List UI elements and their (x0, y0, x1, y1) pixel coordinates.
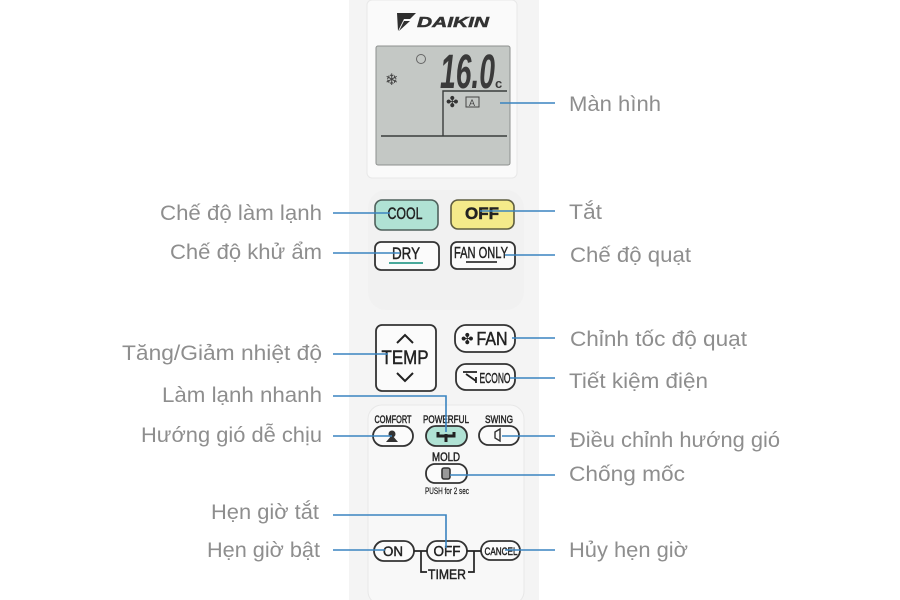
LCD screen: ✤ (446, 94, 459, 111)
LCD screen: 16.0 (440, 46, 495, 99)
button: OFF (451, 200, 514, 229)
LCD screen (376, 46, 510, 165)
button: TEMP: TEMP (382, 348, 428, 369)
button: COMFORT: COMFORT (374, 414, 412, 426)
button: COMFORT (373, 414, 413, 446)
label: Tăng/Giảm nhiệt độ: Tăng/Giảm nhiệt độ (122, 342, 322, 365)
button: FAN: ✤ (461, 331, 474, 348)
button: POWERFUL (423, 414, 469, 446)
timer buttons: CANCEL (484, 546, 518, 558)
label: Chế độ khử ẩm: Chế độ khử ẩm (170, 241, 322, 264)
button: POWERFUL: POWERFUL (423, 414, 469, 426)
Daikin logo (397, 13, 491, 31)
label: Chế độ làm lạnh: Chế độ làm lạnh (160, 202, 322, 225)
remote control body (349, 0, 539, 600)
timer buttons (374, 541, 520, 582)
button: SWING (479, 414, 519, 445)
label: Chỉnh tốc độ quạt: Chỉnh tốc độ quạt (570, 328, 747, 351)
label: Chống mốc: Chống mốc (569, 463, 685, 486)
LCD screen: A (469, 98, 475, 108)
button: DRY: DRY (392, 244, 420, 263)
label: Điều chỉnh hướng gió: Điều chỉnh hướng gió (570, 429, 780, 452)
timer buttons: OFF (434, 543, 460, 560)
timer buttons: ON (383, 543, 403, 559)
button: TEMP (376, 325, 436, 391)
Daikin logo: DAIKIN (417, 14, 491, 31)
LCD screen: c (495, 76, 502, 91)
leader lines (333, 103, 555, 550)
label: Làm lạnh nhanh: Làm lạnh nhanh (162, 384, 322, 407)
button: FAN: FAN (476, 329, 508, 349)
LCD screen: ❄ (385, 72, 398, 89)
button: MOLD: MOLD (432, 450, 460, 464)
label: Hủy hẹn giờ: Hủy hẹn giờ (569, 539, 688, 562)
button: MOLD (425, 450, 469, 496)
button: COOL: COOL (388, 204, 422, 223)
label: Tắt: Tắt (569, 201, 602, 224)
label: Hướng gió dễ chịu: Hướng gió dễ chịu (141, 424, 322, 447)
timer buttons: TIMER (428, 566, 466, 582)
button: COOL (375, 200, 438, 230)
button: FAN (455, 325, 515, 352)
label: Chế độ quạt: Chế độ quạt (570, 244, 691, 267)
button: DRY (375, 242, 439, 270)
button: SWING: SWING (485, 414, 513, 426)
label: Tiết kiệm điện: Tiết kiệm điện (569, 370, 708, 393)
button: MOLD: PUSH for 2 sec (425, 486, 469, 496)
button: OFF: OFF (465, 204, 499, 223)
button: FAN ONLY (451, 242, 515, 269)
button: ECONO (456, 364, 515, 390)
label: Hẹn giờ tắt: Hẹn giờ tắt (211, 501, 319, 524)
label: Màn hình: Màn hình (569, 93, 661, 116)
button: ECONO: ECONO (480, 370, 510, 387)
label: Hẹn giờ bật: Hẹn giờ bật (207, 539, 320, 562)
button: FAN ONLY: FAN ONLY (454, 245, 508, 262)
